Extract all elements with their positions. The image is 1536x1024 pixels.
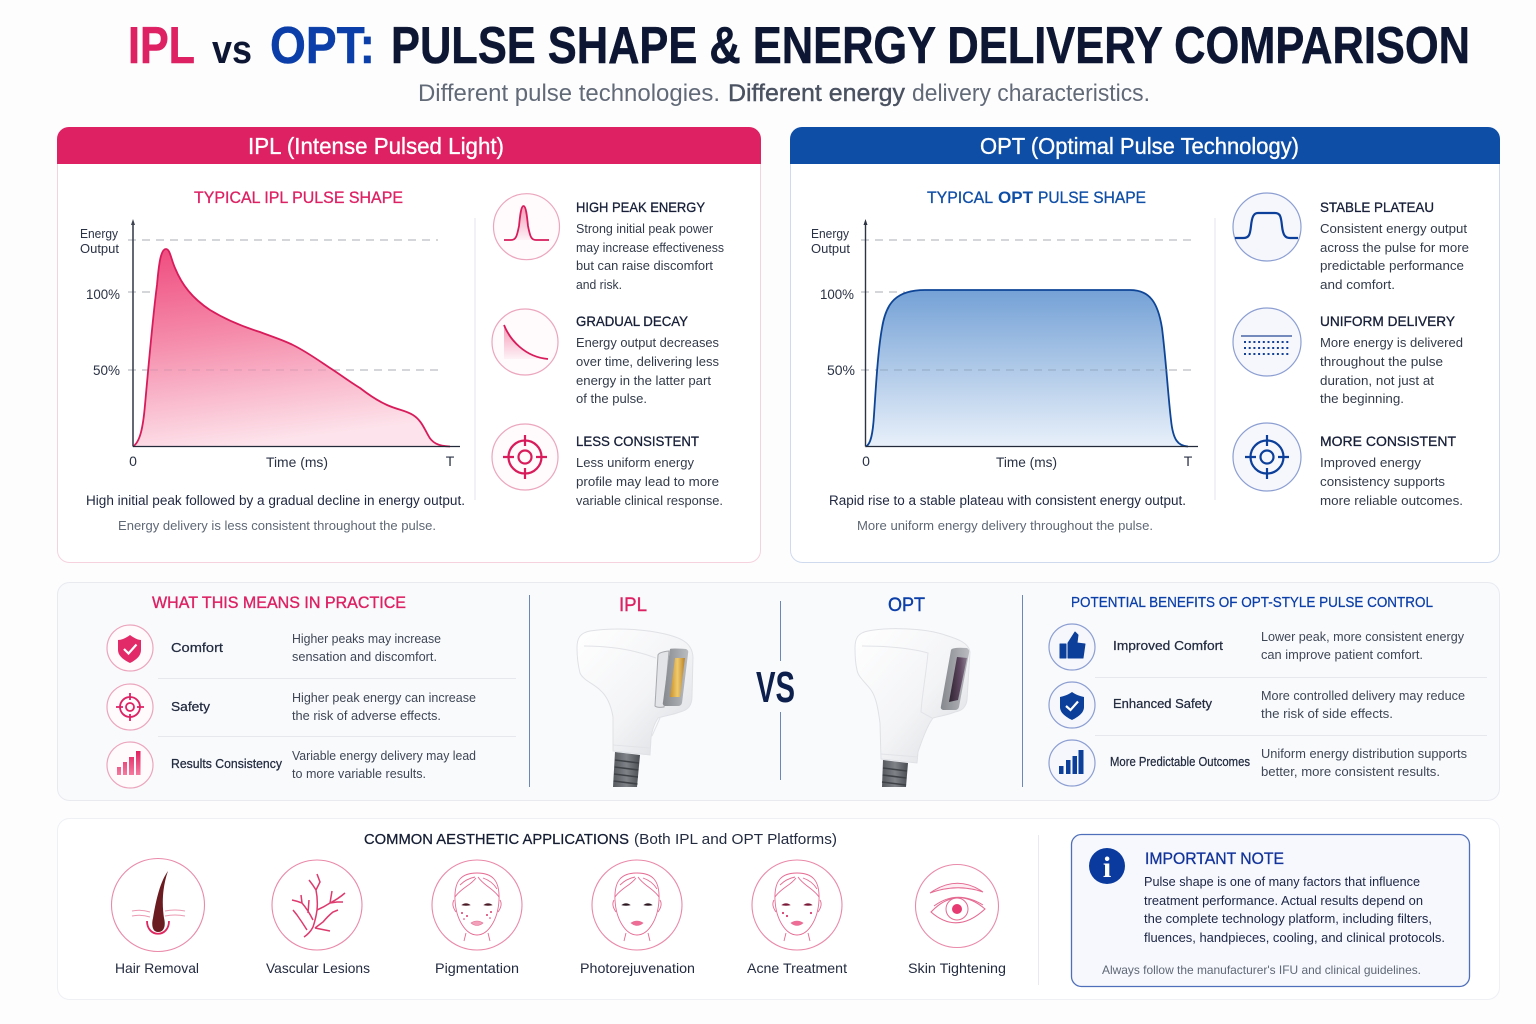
feature: more consistent: Improved energy bbox=[1320, 455, 1422, 470]
subtitle: Different energy bbox=[728, 80, 905, 107]
feature: more consistent bbox=[1320, 433, 1463, 508]
feature: gradual decay: of the pulse. bbox=[576, 391, 647, 406]
OPT pulse chart: 100% bbox=[820, 286, 854, 302]
OPT pulse chart: Time (ms) bbox=[996, 454, 1057, 470]
feature: less consistent: profile may lead to more bbox=[576, 474, 719, 489]
feature: stable plateau: across the pulse for more bbox=[1320, 240, 1469, 255]
row: improved comfort bbox=[1113, 630, 1465, 662]
icon: less consistent target bbox=[492, 424, 558, 490]
row: predictable outcomes: better, more consistent results. bbox=[1261, 765, 1440, 779]
applications heading: COMMON AESTHETIC APPLICATIONS bbox=[364, 831, 629, 848]
icon: stable plateau bbox=[1233, 193, 1301, 261]
OPT chart caption bbox=[829, 493, 1186, 533]
icon: enhanced safety shield bbox=[1049, 682, 1095, 728]
application: acne treatment: Acne Treatment bbox=[747, 960, 847, 976]
title: vs bbox=[212, 28, 252, 72]
OPT chart heading: TYPICAL bbox=[927, 188, 993, 207]
row: results consistency: Results Consistency bbox=[171, 756, 282, 771]
title: IPL bbox=[128, 17, 195, 75]
icon: more consistent target bbox=[1233, 423, 1301, 491]
label: OPT: OPT bbox=[888, 595, 925, 616]
note body: Pulse shape is one of many factors that influence bbox=[1144, 874, 1420, 889]
OPT pulse chart: Energy bbox=[811, 226, 849, 241]
IPL pulse chart: Time (ms) bbox=[266, 454, 328, 470]
feature: high peak energy: may increase effectiveness bbox=[576, 240, 724, 255]
OPT pulse chart: 0 bbox=[862, 453, 870, 469]
row: predictable outcomes: More Predictable Outcomes bbox=[1110, 754, 1250, 769]
IPL chart heading: TYPICAL IPL PULSE SHAPE bbox=[194, 188, 403, 207]
feature: high peak energy: and risk. bbox=[576, 277, 622, 292]
application: pigmentation bbox=[432, 860, 522, 976]
feature: gradual decay: energy in the latter part bbox=[576, 373, 711, 388]
row: results consistency: to more variable results. bbox=[292, 767, 426, 781]
OPT chart heading: PULSE SHAPE bbox=[1038, 188, 1146, 207]
feature: high peak energy: HIGH PEAK ENERGY bbox=[576, 199, 706, 215]
application: vascular lesions: Vascular Lesions bbox=[266, 960, 370, 976]
icon: predictable bars bbox=[1049, 740, 1095, 786]
feature: stable plateau: and comfort. bbox=[1320, 277, 1395, 292]
handpiece: OPT bbox=[855, 629, 970, 787]
OPT chart caption: Rapid rise to a stable plateau with consistent energy output. bbox=[829, 493, 1186, 508]
OPT chart caption: More uniform energy delivery throughout the pulse. bbox=[857, 518, 1153, 533]
row: enhanced safety bbox=[1113, 689, 1465, 721]
feature: high peak energy: Strong initial peak power bbox=[576, 221, 714, 236]
feature: more consistent: more reliable outcomes. bbox=[1320, 493, 1463, 508]
feature: stable plateau: Consistent energy output bbox=[1320, 221, 1467, 236]
IPL pulse chart bbox=[80, 219, 460, 470]
OPT pulse chart bbox=[811, 219, 1198, 470]
icon: gradual decay bbox=[492, 309, 558, 375]
IPL pulse chart: Energy bbox=[80, 226, 118, 241]
heading: potential benefits: POTENTIAL BENEFITS OF OPT-STYLE PULSE CONTROL bbox=[1071, 595, 1433, 611]
application: skin tightening: Skin Tightening bbox=[908, 960, 1006, 976]
row: comfort: sensation and discomfort. bbox=[292, 650, 437, 664]
icon: info bbox=[1089, 848, 1125, 884]
icon: comfort shield bbox=[107, 625, 153, 671]
IPL pulse chart: 100% bbox=[86, 286, 120, 302]
panel: aesthetic applications bbox=[58, 818, 1500, 1000]
feature: uniform delivery bbox=[1320, 313, 1463, 406]
vs badge: VS bbox=[756, 663, 795, 712]
callout: important note bbox=[1072, 834, 1470, 986]
feature: gradual decay: Energy output decreases bbox=[576, 335, 719, 350]
icon: info: i bbox=[1103, 851, 1111, 884]
row: enhanced safety: the risk of side effects. bbox=[1261, 707, 1393, 721]
note heading: IMPORTANT NOTE bbox=[1145, 850, 1284, 868]
application: vascular lesions bbox=[266, 860, 370, 976]
feature: uniform delivery: duration, not just at bbox=[1320, 373, 1434, 388]
application: acne treatment bbox=[747, 860, 847, 976]
feature: less consistent: Less uniform energy bbox=[576, 455, 695, 470]
handpiece: IPL bbox=[577, 629, 693, 787]
feature: stable plateau bbox=[1320, 199, 1469, 292]
feature: less consistent bbox=[576, 433, 723, 508]
IPL chart caption: High initial peak followed by a gradual decline in energy output. bbox=[86, 493, 465, 508]
IPL pulse chart: T bbox=[446, 453, 455, 469]
OPT chart heading: OPT bbox=[998, 188, 1034, 207]
note body: treatment performance. Actual results depend on bbox=[1144, 893, 1423, 908]
OPT pulse chart: T bbox=[1184, 453, 1193, 469]
feature: more consistent: MORE CONSISTENT bbox=[1320, 433, 1456, 449]
feature: gradual decay: GRADUAL DECAY bbox=[576, 313, 689, 329]
icon: uniform delivery bbox=[1233, 308, 1301, 376]
icon: thumbs up bbox=[1049, 624, 1095, 670]
OPT pulse chart: 50% bbox=[827, 362, 855, 378]
subtitle: delivery characteristics. bbox=[912, 80, 1150, 107]
feature: uniform delivery: UNIFORM DELIVERY bbox=[1320, 313, 1456, 329]
heading: what this means: WHAT THIS MEANS IN PRACTICE bbox=[152, 594, 406, 612]
row: predictable outcomes bbox=[1110, 747, 1467, 779]
row: enhanced safety: More controlled delivery may reduce bbox=[1261, 689, 1465, 703]
panel: practice comparison bbox=[58, 582, 1500, 800]
IPL header bbox=[57, 127, 761, 164]
OPT chart heading bbox=[927, 188, 1146, 207]
row: results consistency bbox=[171, 749, 476, 781]
note body: the complete technology platform, including filters, bbox=[1144, 911, 1432, 926]
row: enhanced safety: Enhanced Safety bbox=[1113, 696, 1212, 711]
row: safety: the risk of adverse effects. bbox=[292, 709, 441, 723]
application: skin tightening bbox=[908, 864, 1006, 976]
feature: uniform delivery: throughout the pulse bbox=[1320, 354, 1443, 369]
row: comfort bbox=[171, 632, 441, 664]
application: hair removal bbox=[112, 858, 204, 976]
icon: safety target bbox=[107, 684, 153, 730]
feature: gradual decay bbox=[576, 313, 719, 406]
row: improved comfort: Improved Comfort bbox=[1113, 638, 1223, 653]
feature: high peak energy bbox=[576, 199, 724, 292]
feature: more consistent: consistency supports bbox=[1320, 474, 1446, 489]
feature: less consistent: LESS CONSISTENT bbox=[576, 433, 699, 449]
row: comfort: Higher peaks may increase bbox=[292, 632, 441, 646]
row: safety bbox=[171, 691, 476, 723]
feature: high peak energy: but can raise discomfort bbox=[576, 258, 713, 273]
feature: less consistent: variable clinical response. bbox=[576, 493, 723, 508]
OPT pulse chart: Output bbox=[811, 241, 850, 256]
IPL pulse chart: 50% bbox=[93, 362, 120, 378]
feature: uniform delivery: More energy is delivered bbox=[1320, 335, 1463, 350]
note footer: Always follow the manufacturer's IFU and clinical guidelines. bbox=[1102, 963, 1421, 977]
panel: OPT bbox=[790, 127, 1500, 562]
subtitle bbox=[418, 80, 1150, 107]
IPL header: IPL (Intense Pulsed Light) bbox=[248, 133, 504, 159]
row: comfort: Comfort bbox=[171, 640, 223, 655]
applications heading: (Both IPL and OPT Platforms) bbox=[634, 831, 837, 848]
note body bbox=[1144, 874, 1445, 945]
title: OPT: bbox=[270, 17, 375, 75]
label: IPL: IPL bbox=[619, 595, 647, 616]
feature: stable plateau: predictable performance bbox=[1320, 258, 1464, 273]
feature: uniform delivery: the beginning. bbox=[1320, 391, 1404, 406]
OPT header bbox=[790, 127, 1500, 164]
row: improved comfort: can improve patient comfort. bbox=[1261, 648, 1423, 662]
subtitle: Different pulse technologies. bbox=[418, 80, 720, 107]
application: photorejuvenation: Photorejuvenation bbox=[580, 960, 695, 976]
panel: IPL bbox=[57, 127, 761, 562]
note body: fluences, handpieces, cooling, and clinical protocols. bbox=[1144, 930, 1445, 945]
application: photorejuvenation bbox=[580, 860, 695, 976]
feature: gradual decay: over time, delivering less bbox=[576, 354, 719, 369]
icon: results bars bbox=[107, 742, 153, 788]
row: improved comfort: Lower peak, more consistent energy bbox=[1261, 630, 1465, 644]
OPT header: OPT (Optimal Pulse Technology) bbox=[980, 133, 1299, 159]
application: hair removal: Hair Removal bbox=[115, 960, 199, 976]
row: safety: Safety bbox=[171, 699, 211, 714]
applications heading bbox=[364, 831, 837, 848]
IPL chart caption: Energy delivery is less consistent throughout the pulse. bbox=[118, 518, 436, 533]
icon: high peak bbox=[494, 194, 560, 260]
row: results consistency: Variable energy delivery may lead bbox=[292, 749, 476, 763]
IPL pulse chart: 0 bbox=[129, 453, 137, 469]
application: pigmentation: Pigmentation bbox=[435, 960, 519, 976]
row: predictable outcomes: Uniform energy distribution supports bbox=[1261, 747, 1467, 761]
feature: stable plateau: STABLE PLATEAU bbox=[1320, 199, 1434, 215]
IPL chart caption bbox=[86, 493, 465, 533]
IPL pulse chart: Output bbox=[80, 241, 119, 256]
row: safety: Higher peak energy can increase bbox=[292, 691, 476, 705]
